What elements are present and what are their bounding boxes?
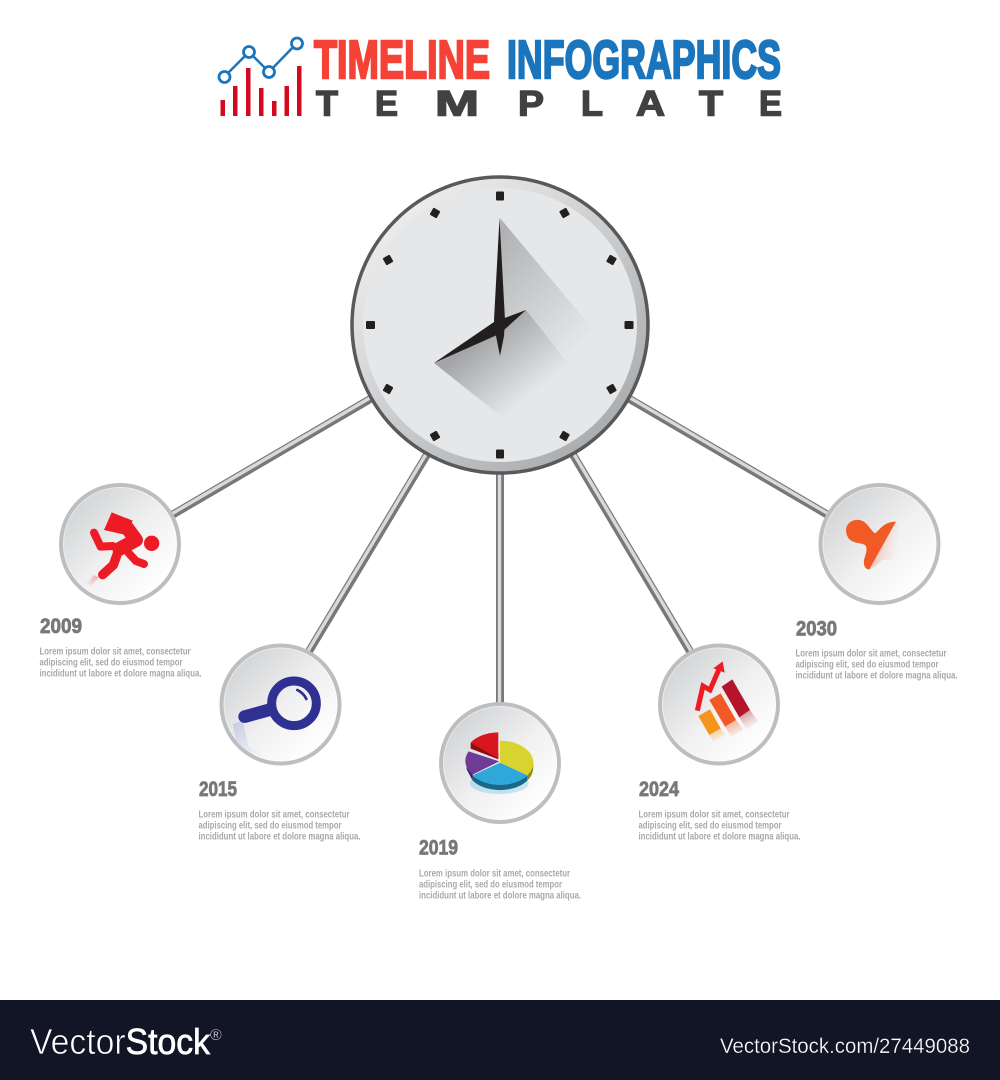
description 2009: Lorem ipsum dolor sit amet, consectetur [40, 646, 191, 658]
milestone 2019 [419, 704, 581, 902]
description 2024: incididunt ut labore et dolore magna aliqua. [638, 832, 801, 842]
description 2019: adipiscing elit, sed do eiusmod tempor [419, 880, 562, 890]
title: Timeline Infographics: TIMELINE [314, 30, 490, 90]
hour ticks [366, 192, 634, 458]
registered mark: ® [210, 1027, 222, 1044]
year 2009: 2009 [40, 615, 82, 638]
circle badge 2009 [61, 485, 179, 603]
milestone 2030 [796, 485, 958, 682]
circle badge 2015 [222, 646, 340, 764]
description 2019 [419, 868, 581, 902]
description 2019: Lorem ipsum dolor sit amet, consectetur [419, 868, 570, 880]
description 2015: adipiscing elit, sed do eiusmod tempor [198, 820, 342, 832]
description 2030 [796, 648, 958, 682]
subtitle: Template: E [759, 84, 782, 124]
icon: running person with box [86, 512, 159, 586]
milestone 2009 [40, 485, 202, 680]
description 2030: incididunt ut labore et dolore magna aliqua. [796, 670, 958, 682]
footer bar [0, 1000, 1000, 1080]
year 2024: 2024 [639, 778, 679, 801]
year 2030: 2030 [796, 618, 837, 640]
icon: rising bar chart [697, 661, 758, 742]
subtitle: Template: A [636, 84, 665, 124]
icon: 3D pie chart [465, 732, 533, 794]
milestone 2024 [638, 646, 801, 842]
connector rods [172, 397, 828, 703]
description 2009 [40, 646, 202, 680]
hand shadows [434, 218, 612, 422]
subtitle: Template: T [699, 84, 723, 124]
description 2024: adipiscing elit, sed do eiusmod tempor [638, 820, 782, 832]
circle badge 2019 [441, 704, 559, 822]
subtitle: Template: L [581, 84, 603, 124]
description 2030: Lorem ipsum dolor sit amet, consectetur [796, 648, 947, 660]
description 2015 [198, 810, 361, 842]
clock hands [434, 218, 526, 363]
description 2019: incididunt ut labore et dolore magna aliqua. [419, 890, 581, 902]
clock face [363, 188, 637, 462]
subtitle: Template: M [435, 84, 479, 124]
footer logo: VectorStock [30, 1021, 211, 1062]
circle badge 2030 [820, 485, 938, 603]
title: Timeline Infographics [314, 30, 781, 90]
description 2015: incididunt ut labore et dolore magna aliqua. [198, 832, 361, 842]
description 2009: adipiscing elit, sed do eiusmod tempor [40, 658, 183, 668]
subtitle: Template: T [316, 84, 338, 124]
icon: magnifying glass [233, 681, 316, 757]
clock bezel [352, 177, 648, 473]
clock [352, 177, 648, 473]
description 2024: Lorem ipsum dolor sit amet, consectetur [638, 810, 790, 820]
description 2024 [638, 810, 801, 842]
title: Timeline Infographics: INFOGRAPHICS [507, 30, 781, 90]
year 2019: 2019 [419, 836, 458, 860]
icon: orange abstract shape [846, 520, 901, 569]
title logo icon [219, 38, 302, 116]
milestone 2015 [198, 646, 361, 842]
subtitle: Template: E [375, 84, 398, 124]
year 2015: 2015 [199, 778, 237, 801]
description 2030: adipiscing elit, sed do eiusmod tempor [796, 660, 939, 670]
footer image id: VectorStock.com/27449088 [720, 1035, 970, 1058]
description 2015: Lorem ipsum dolor sit amet, consectetur [198, 810, 350, 820]
circle badge 2024 [660, 646, 778, 764]
subtitle: Template: P [518, 84, 544, 124]
subtitle: Template [316, 84, 782, 124]
description 2009: incididunt ut labore et dolore magna aliqua. [40, 668, 202, 680]
